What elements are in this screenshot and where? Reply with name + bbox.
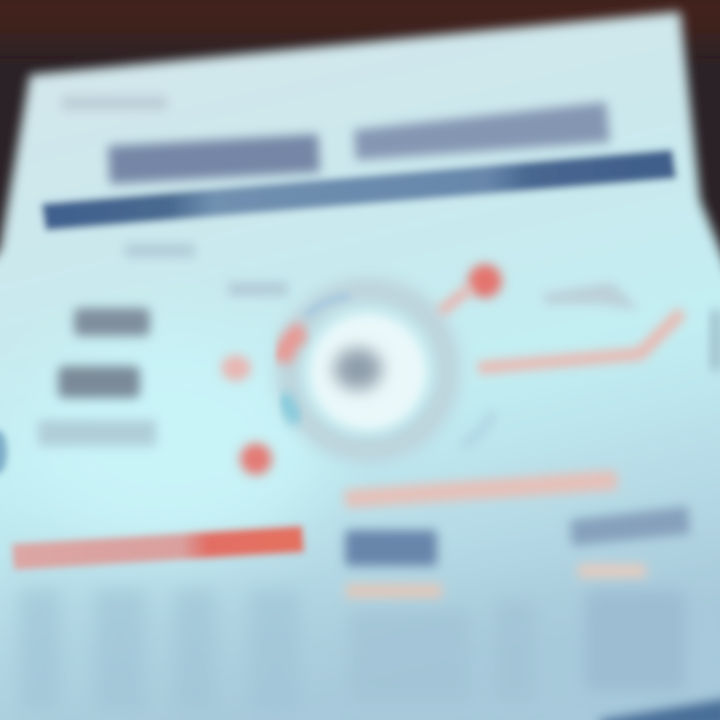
teal segment [284, 394, 298, 422]
header band [42, 150, 676, 230]
title [108, 102, 610, 184]
red marker top right [440, 264, 502, 312]
red marker bottom left [240, 443, 272, 475]
left red banner [12, 526, 304, 570]
right blue stat [570, 506, 690, 578]
left stats [38, 308, 156, 446]
right salmon heading [344, 470, 618, 508]
blue stat caption [346, 584, 442, 598]
table columns [20, 590, 685, 710]
blue segment [306, 296, 350, 316]
stat one [74, 308, 150, 336]
donut inner [310, 314, 426, 430]
pale red tick [221, 355, 251, 381]
title: right block [354, 102, 610, 160]
paper tonal shading [0, 310, 720, 720]
donut chart [221, 290, 448, 450]
stat caption [38, 420, 156, 446]
donut outer ring [288, 290, 448, 450]
label above donut [228, 282, 288, 296]
right blue caption [578, 564, 646, 578]
title: left block [108, 134, 320, 184]
red segment [282, 330, 304, 362]
stat two [58, 366, 140, 398]
right label [542, 282, 640, 310]
blue stat [345, 530, 442, 598]
subheading left [125, 244, 195, 257]
donut centre label [334, 348, 382, 390]
right red line [478, 312, 682, 368]
pale blue arc under donut [462, 412, 494, 446]
small header mark [62, 96, 167, 110]
